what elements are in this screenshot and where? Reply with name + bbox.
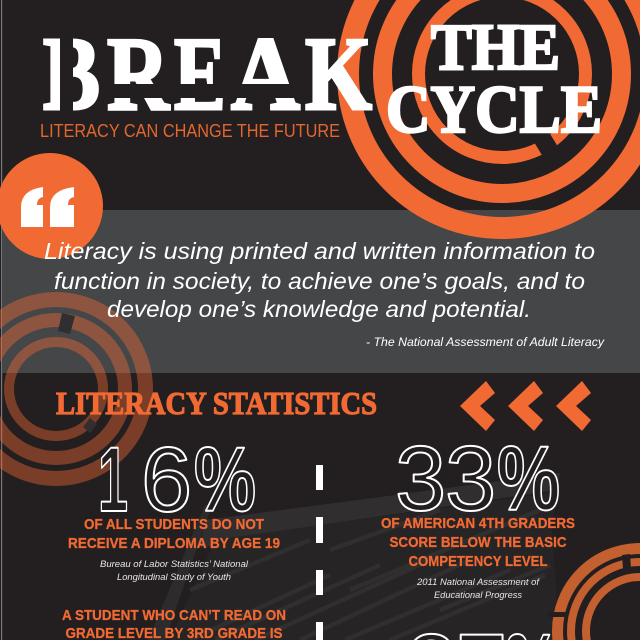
large concentric rings [348,0,640,228]
quote attribution: - The National Assessment of Adult Literacy [366,337,605,349]
title: BREAK [43,15,372,132]
title: BREAK: B [43,15,100,132]
statistic: 16%: Longitudinal Study of Youth [117,572,231,583]
title: BREAK: E [174,15,226,132]
statistic: 33%: 2011 National Assessment of [416,577,540,588]
quote text: Literacy is using printed and written information to [44,238,595,264]
background: faint book and pencil shape [148,473,560,640]
faded rings left [0,300,146,478]
statistic: 16%: OF ALL STUDENTS DO NOT [84,516,264,533]
quote text: function in society, to achieve one’s goals, and to [54,268,585,294]
dashed divider [316,465,323,640]
chevron arrows [460,381,591,431]
statistic: student reading level [62,607,286,640]
title: BREAK: A [231,15,300,132]
subtitle: LITERACY CAN CHANGE THE FUTURE [40,120,340,141]
statistic: student reading level: A STUDENT WHO CAN’T READ ON [62,607,286,624]
title: BREAK: R [107,15,170,132]
quote band [2,210,640,373]
statistic: 33%: COMPETENCY LEVEL [408,553,548,570]
statistic: 16%: % [194,429,256,531]
statistic: 33%: 3 [395,428,446,530]
title: BREAK: K [305,15,372,132]
statistic: 33% [381,428,575,601]
statistic: 16%: RECEIVE A DIPLOMA BY AGE 19 [68,535,280,552]
statistic: 33%: Educational Progress [434,590,522,601]
statistic: 33%: 3 [445,428,496,530]
statistic: 16%: 6 [141,429,192,531]
statistic: 37% [406,616,560,640]
statistic: 16% [68,429,280,583]
quote icon [0,153,103,259]
statistic: 16%: Bureau of Labor Statistics’ National [100,559,249,570]
statistic: 33%: OF AMERICAN 4TH GRADERS [381,515,575,532]
statistic: 33%: % [497,428,560,530]
heading: literacy statistics: LITERACY STATISTICS [56,385,377,421]
faded ring gaps [58,313,97,433]
title: CYCLE: CYCLE [386,71,602,147]
quote text: develop one’s knowledge and potential. [107,296,531,322]
title: THE: THE [431,11,560,84]
quote text [44,238,595,322]
rings bottom right [548,548,640,640]
statistic: 16%: 1 [98,429,128,531]
statistic: 33%: SCORE BELOW THE BASIC [390,534,567,551]
